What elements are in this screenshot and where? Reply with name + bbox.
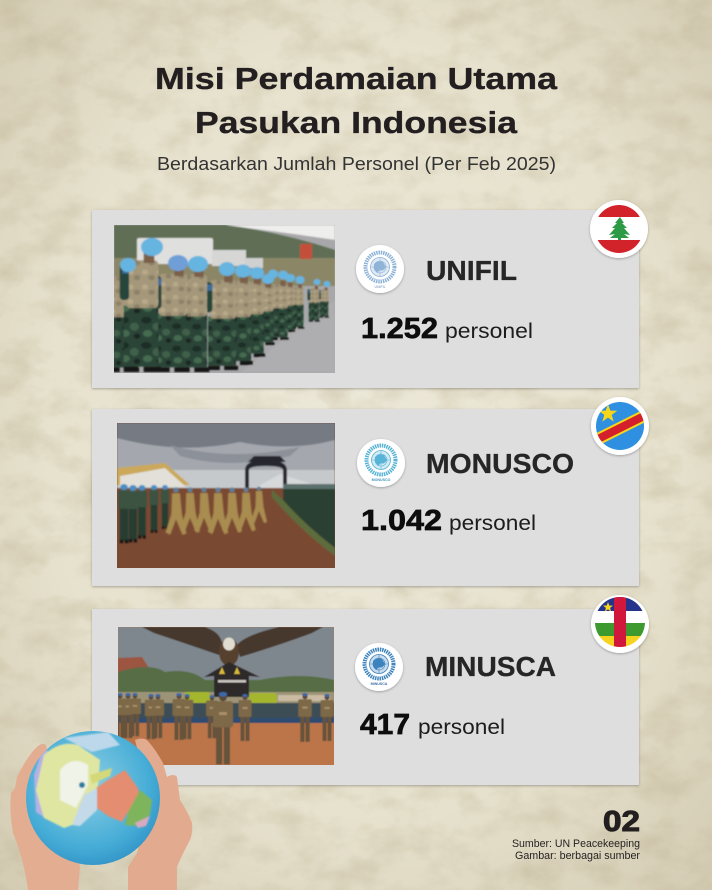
panel: UNIFIL — [92, 200, 648, 388]
page number: 02 — [603, 806, 640, 838]
title — [155, 61, 558, 140]
personnel count — [361, 505, 536, 537]
flag: DR Congo — [591, 397, 649, 455]
subtitle: Berdasarkan Jumlah Personel (Per Feb 2025) — [157, 154, 556, 174]
personnel count — [360, 709, 505, 741]
photo: parade at camp gate — [117, 423, 335, 568]
personnel count: 1.042 — [361, 505, 442, 537]
right hand — [128, 738, 192, 890]
card background — [92, 609, 639, 785]
personnel count: 417 — [360, 709, 410, 741]
left hand — [10, 744, 80, 890]
personnel count: personel — [418, 716, 505, 739]
photo: eagle monument and troops — [114, 627, 334, 765]
source credits: Sumber: UN Peacekeeping — [512, 838, 640, 850]
flag: Central African Republic — [591, 595, 649, 653]
source credits — [512, 838, 640, 862]
UN logo — [357, 439, 405, 487]
icon: hands holding globe — [10, 731, 192, 890]
panel: MONUSCO — [92, 397, 649, 586]
personnel count — [361, 313, 533, 345]
personnel count: personel — [445, 320, 533, 343]
panel: MINUSCA — [92, 595, 649, 785]
flag: Lebanon — [590, 200, 648, 258]
UN logo: UNIFIL — [374, 285, 386, 289]
personnel count: 1.252 — [361, 313, 438, 345]
source credits: Gambar: berbagai sumber — [515, 850, 640, 862]
globe — [26, 731, 160, 865]
title: Misi Perdamaian Utama — [155, 61, 558, 96]
UN logo — [356, 245, 404, 293]
UN logo: MINUSCA — [371, 682, 388, 686]
UN logo: MONUSCO — [372, 478, 391, 482]
card background — [92, 210, 639, 388]
personnel count: personel — [449, 512, 536, 535]
card background — [92, 409, 639, 586]
mission name: MINUSCA — [425, 651, 556, 682]
UN logo — [355, 643, 403, 691]
mission name: UNIFIL — [426, 255, 517, 286]
photo: soldiers standing in line — [104, 225, 335, 373]
mission name: MONUSCO — [426, 448, 574, 479]
title: Pasukan Indonesia — [195, 105, 518, 140]
